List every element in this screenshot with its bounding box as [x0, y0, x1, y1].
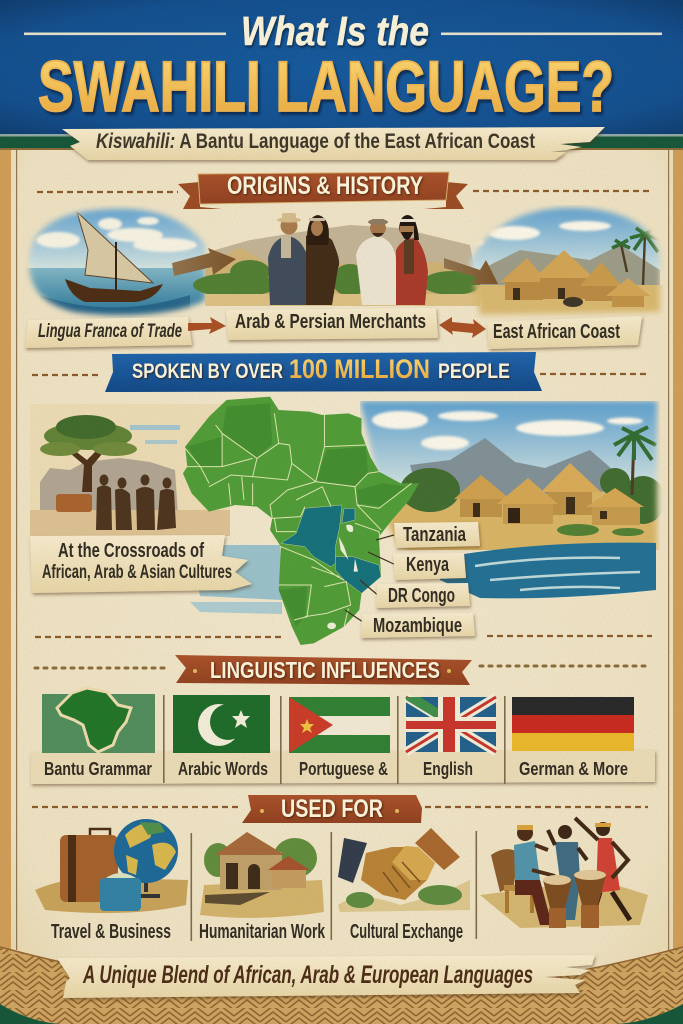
caption: arab and persian merchants — [226, 308, 438, 340]
drummer two — [548, 825, 587, 920]
icon: palm trees — [612, 228, 660, 285]
icon: acacia tree — [40, 415, 137, 492]
flag: german — [512, 697, 634, 751]
flag: english union jack — [406, 697, 496, 752]
icon: thatched huts — [454, 463, 644, 536]
flag: portuguese — [289, 697, 390, 753]
callout: tanzania — [376, 522, 480, 548]
arrow: merchants to coast — [444, 258, 498, 284]
label: humanitarian work: Humanitarian Work — [199, 921, 326, 943]
caption: crossroads of cultures — [30, 535, 252, 593]
scene: dhow at sea — [25, 205, 215, 320]
dividers — [190, 831, 477, 941]
caption: arab and persian merchants: Arab & Persian Merchants — [235, 311, 426, 333]
heading: linguistic influences — [35, 655, 645, 685]
caption: lingua franca of trade: Lingua Franca of Trade — [38, 321, 182, 342]
figure: merchant in hat and blue coat — [268, 213, 308, 305]
panel: tropical village coast — [360, 401, 665, 550]
icon: suitcase and globe — [35, 819, 188, 913]
figures: four silhouettes — [96, 474, 176, 530]
icon: market hut — [56, 494, 92, 512]
callout: dr congo — [360, 580, 470, 608]
icon: drummers and dancer — [480, 818, 648, 928]
footer woven band — [0, 947, 683, 1024]
caption: crossroads of cultures: African, Arab & Asian Cultures — [42, 562, 232, 583]
caption: crossroads of cultures: At the Crossroads of — [58, 540, 204, 562]
influence labels: German & More — [519, 759, 628, 779]
title line one: What Is the — [241, 8, 429, 54]
flag: arabic words crescent — [173, 695, 270, 753]
influence labels: English — [423, 759, 473, 779]
country: dr congo highlight — [281, 505, 342, 567]
callout: kenya — [368, 552, 466, 580]
drummer one — [514, 825, 555, 925]
influence labels — [44, 759, 628, 779]
title — [24, 8, 662, 127]
callout: mozambique — [345, 610, 475, 638]
map: africa — [183, 397, 419, 645]
subtitle text: Kiswahili: A Bantu Language of the East African Coast — [96, 130, 535, 153]
influence labels: Arabic Words — [178, 759, 268, 779]
heading: origins and history — [37, 172, 650, 209]
heading: used for: USED FOR — [281, 795, 383, 823]
label: cultural exchange: Cultural Exchange — [350, 921, 463, 943]
water: sea behind map — [190, 543, 656, 614]
figure: man in white robe — [356, 219, 396, 305]
heading: spoken by over 100 million people: 100 MILLION — [289, 354, 430, 384]
label: travel and business: Travel & Business — [51, 921, 171, 943]
arrow: boat to merchants — [172, 248, 236, 276]
arrow: trade to merchants — [188, 317, 226, 334]
heading: origins and history: ORIGINS & HISTORY — [227, 172, 423, 200]
footer ribbon — [57, 955, 595, 998]
heading: spoken by over 100 million people — [32, 352, 650, 392]
bushes — [193, 260, 482, 297]
subtitle ribbon — [62, 127, 605, 160]
icon: dhow boat — [65, 212, 163, 302]
country borders — [185, 413, 412, 627]
icon: humanitarian building — [200, 832, 324, 918]
drums — [543, 870, 606, 928]
panel: crossroads scene — [30, 404, 230, 536]
flag: bantu grammar africa — [42, 688, 155, 753]
callout: dr congo: DR Congo — [388, 585, 455, 607]
influence labels: Bantu Grammar — [44, 759, 152, 779]
header banner — [0, 0, 683, 150]
dancer — [575, 818, 630, 920]
figure: merchant in dark robe — [306, 215, 339, 305]
influence labels: Portuguese & — [299, 759, 388, 779]
country: tanzania highlight — [335, 557, 381, 593]
caption: east african coast: East African Coast — [493, 321, 620, 343]
callout: mozambique: Mozambique — [373, 615, 462, 637]
figure: man in red robe — [396, 215, 428, 305]
arrow: two way merchants and coast — [439, 317, 486, 338]
lakes — [327, 525, 358, 629]
heading: spoken by over 100 million people: SPOKEN BY OVER — [132, 360, 283, 383]
icon: thatched huts — [500, 250, 650, 307]
heading: spoken by over 100 million people: PEOPLE — [438, 360, 510, 383]
panel: influences strip — [31, 688, 655, 784]
icon: handshake — [338, 828, 470, 912]
caption: lingua franca of trade — [25, 317, 192, 348]
country: uganda highlight — [342, 508, 355, 523]
scene: east african coast village — [456, 205, 665, 320]
icon: palm tree — [614, 427, 656, 495]
callout: tanzania: Tanzania — [403, 524, 467, 546]
scene: merchants — [193, 213, 482, 306]
caption: east african coast — [487, 316, 642, 349]
callout: kenya: Kenya — [406, 554, 450, 576]
heading: linguistic influences: LINGUISTIC INFLUENCES — [210, 657, 440, 683]
heading: used for — [32, 795, 648, 823]
